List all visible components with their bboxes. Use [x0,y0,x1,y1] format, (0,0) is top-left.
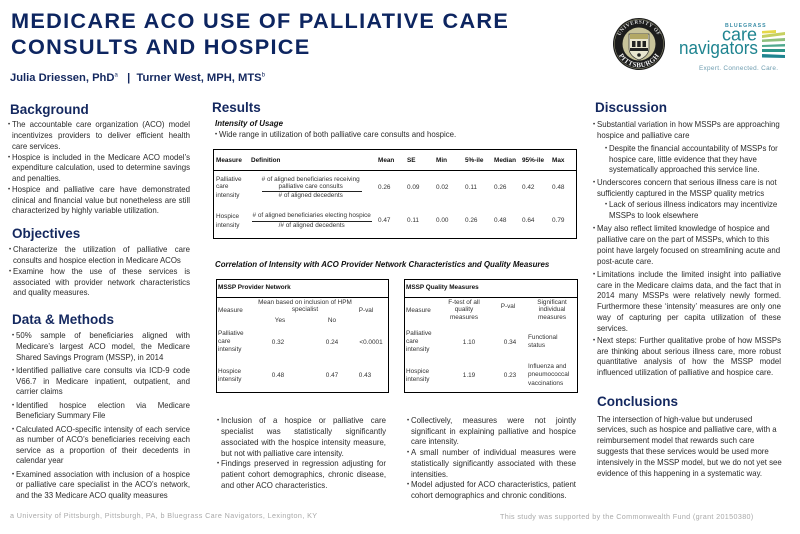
title [11,8,509,59]
table: intensity of usage: Mean [378,157,394,164]
discussion bullet 5: influenced utilization of palliative and hospice care. [597,368,773,377]
data and methods bullets: Identified hospice election via Medicare [16,401,190,410]
background bullets: characterized by highly variable utilization. [12,206,159,215]
heading: background: Background [10,102,89,117]
panel: discussion [593,100,781,377]
subheading: intensity of usage: Intensity of Usage [215,119,283,128]
table: intensity of usage [213,149,577,239]
text: provider network findings: and other ACO characteristics. [221,481,327,490]
panel: data and methods [12,312,190,500]
table: intensity of usage: 0.11 [465,184,477,191]
data and methods bullets: Calculated ACO-specific intensity of each service [16,425,190,434]
table: MSSP quality measures [404,279,578,393]
discussion sub-bullet 1 [605,144,778,174]
data and methods bullets: service as a proportion of their decedents in [16,446,190,455]
background bullets: and penalties. [12,174,61,183]
logo: University of Pittsburgh seal: UNIVERSITY OF [617,20,661,35]
table: intensity of usage: 0.48 [552,184,564,191]
table: intensity of usage: Max [552,157,564,164]
conclusions text: intensively in the MSSP model, but we do not yet see [597,458,782,467]
background bullets: incentivizes providers to deliver efficient health [12,131,190,140]
footer: funding: This study was supported by the Commonwealth Fund (grant 20150380) [500,512,754,521]
table: intensity of usage: 0.02 [436,184,448,191]
table: intensity of usage: # of aligned decedents [279,192,343,199]
conclusions text: The intersection of high-value but underused [597,415,752,424]
discussion bullet 2: Underscores concern that serious illness care is not [597,178,777,187]
discussion bullet 2: sufficiently captured in the MSSP quality metrics [597,189,764,198]
table: MSSP quality measures: Measure [406,307,431,314]
table: intensity of usage: 95%-ile [522,157,544,164]
discussion bullet 5: quantitative analysis of how the MSSP model [597,357,781,366]
table: MSSP provider network: care [218,338,230,345]
discussion sub-bullet 2: MSSPs to look elsewhere [609,211,698,220]
table: intensity of usage: 0.26 [465,217,477,224]
conclusions text [597,415,782,478]
table: intensity of usage: care [216,183,228,190]
data and methods bullets: calendar year [16,456,64,465]
authors: Julia Driessen, PhDa | Turner West, MPH, MTSb [10,72,265,84]
objectives bullets: Characterize the utilization of palliative care [13,245,190,254]
table: intensity of usage: 0.79 [552,217,564,224]
table: MSSP quality measures: P-val [501,303,515,310]
discussion bullet 1: Substantial variation in how MSSPs are approaching [597,120,780,129]
objectives bullets [9,245,190,297]
discussion bullet 3: May also reflect limited knowledge of hospice and [597,224,770,233]
text: quality measure findings: significant in explaining palliative and hospice [411,427,576,436]
data and methods bullets: or palliative care specialist in the ACO’s network, [16,480,190,489]
data and methods bullets: 50% sample of beneficiaries aligned with [16,331,190,340]
subheading: correlation: Correlation of Intensity with ACO Provider Network Characteristics and Quality Measures [215,260,549,269]
table: intensity of usage: /# of aligned decedents [279,222,345,229]
discussion bullet 5: are thinking about serious illness care, more robust [597,347,781,356]
logo: Bluegrass Care Navigators: Expert. Connected. Care. [699,65,778,72]
table: MSSP provider network: MSSP Provider Network [218,284,291,291]
table: intensity of usage: Hospice [216,213,239,220]
table: MSSP quality measures: MSSP Quality Measures [406,284,479,291]
table: intensity of usage: 0.11 [407,217,419,224]
discussion sub-bullet 2: Lack of serious illness indicators may incentivize [609,200,777,209]
heading: objectives: Objectives [12,226,80,241]
text: quality measure findings: Collectively, measures were not jointly [411,416,576,425]
table: intensity of usage: 0.26 [378,184,390,191]
text: provider network findings: patient cohort demographics, chronic disease, [221,470,386,479]
text: quality measure findings [407,416,576,500]
objectives bullets: and quality measures. [13,288,90,297]
table: intensity of usage: Measure [216,157,242,164]
heading: results: Results [212,100,261,115]
table: intensity of usage: palliative care consults [279,183,343,190]
discussion bullet 4: Limitations include the limited insight into palliative [597,270,781,279]
objectives bullets: consults and hospice election in Medicare ACOs [13,256,181,265]
table: MSSP quality measures: measures [450,314,478,321]
discussion sub-bullet 1: Despite the financial accountability of MSSPs for [609,144,778,153]
discussion bullet 3: post-acute care. [597,257,653,266]
table: intensity of usage: 0.47 [378,217,390,224]
text: provider network findings: specialist was statistically significantly [221,427,386,436]
background bullets: The accountable care organization (ACO) model [12,120,190,129]
discussion sub-bullet 1: systematically approached this service line. [609,165,759,174]
table: MSSP quality measures: individual [539,306,565,313]
table: MSSP provider network: 0.43 [359,372,371,379]
data and methods bullets: Medicare’s largest ACO model, the Medicare [16,342,190,351]
text: quality measure findings: intensities. [411,470,448,479]
discussion bullet 2 [593,178,777,198]
table: intensity of usage: 0.09 [407,184,419,191]
table: intensity of usage: Min [436,157,447,164]
conclusions text: suggests that these services would be used more [597,447,769,456]
background bullets: Hospice is included in the Medicare ACO model’s [12,153,190,162]
heading: discussion: Discussion [595,100,667,115]
table: MSSP provider network: 0.48 [272,372,284,379]
table: MSSP provider network: No [328,317,336,324]
table: intensity of usage: SE [407,157,416,164]
logo: University of Pittsburgh seal: PITTSBURGH [618,53,660,68]
discussion bullet 4: Furthermore these ‘intensity’ measures are only one [597,302,781,311]
table: MSSP provider network: 0.32 [272,339,284,346]
table: MSSP quality measures: status [528,342,545,349]
text: provider network findings: associated with the hospice intensity measure, [221,438,386,447]
table: MSSP quality measures: measures [538,314,566,321]
table: intensity of usage: intensity [216,192,239,199]
footer: affiliations: a University of Pittsburgh, Pittsburgh, PA, b Bluegrass Care Navigators, Lexington, KY [10,511,317,520]
discussion bullet 1 [593,120,780,140]
table: intensity of usage: Median [494,157,516,164]
table: MSSP quality measures: F-test of all [448,299,480,306]
table: MSSP quality measures: Hospice [406,368,429,375]
table: MSSP quality measures: 1.10 [463,339,475,346]
logo: University of Pittsburgh seal [613,18,665,70]
title: CONSULTS AND HOSPICE [11,34,311,59]
table: MSSP quality measures: intensity [406,376,429,383]
title: MEDICARE ACO USE OF PALLIATIVE CARE [11,8,509,33]
table: MSSP quality measures: intensity [406,346,429,353]
data and methods bullets [12,331,190,500]
background bullets: care services. [12,142,60,151]
table: intensity of usage: Palliative [216,176,242,183]
table: intensity of usage: Definition [251,157,280,164]
text: quality measure findings: A small number of individual measures were [411,448,576,457]
table: MSSP provider network: Hospice [218,368,241,375]
panel: conclusions [597,394,782,478]
data and methods bullets: and the 33 Medicare ACO quality measures [16,491,168,500]
conclusions text: reimbursement model that rewards such care [597,436,754,445]
discussion sub-bullet 2 [605,200,777,220]
table: MSSP quality measures: 1.19 [463,372,475,379]
table: MSSP quality measures: care [406,338,418,345]
logo: Bluegrass Care Navigators: BLUEGRASS [725,23,767,29]
table: intensity of usage: # of aligned beneficiaries electing hospice [253,212,371,219]
table: MSSP provider network: 0.24 [326,339,338,346]
discussion bullet 4: way of capturing per capita utilization of these [597,313,781,322]
table: MSSP provider network: Palliative [218,330,244,337]
discussion bullet 4 [593,270,781,333]
data and methods bullets: Shared Savings Program (MSSP), in 2014 [16,353,163,362]
background bullets: Hospice and palliative care have demonstrated [12,185,190,194]
discussion bullet 4: services. [597,324,628,333]
panel: objectives [9,226,190,297]
text: quality measure findings: Model adjusted for ACO characteristics, patient [411,480,576,489]
table: MSSP quality measures: Palliative [406,330,432,337]
heading: conclusions: Conclusions [597,394,678,409]
table: intensity of usage: 0.48 [494,217,506,224]
logo: Bluegrass Care Navigators: navigators [679,38,758,58]
background bullets: clinical and financial value but nonetheless are still [12,196,190,205]
table: MSSP provider network: specialist [292,306,318,313]
table: MSSP provider network [216,279,389,393]
discussion bullet 4: 2014 many MSSPs were relatively newly formed. [597,291,781,300]
table: MSSP quality measures: vaccinations [528,380,563,387]
table: MSSP provider network: P-val [359,307,373,314]
results intro bullet: Wide range in utilization of both palliative care consults and hospice. [219,130,456,139]
discussion bullet 3: palliative care on the part of MSSPs, which to this [597,235,769,244]
logo: Bluegrass Care Navigators: care [722,24,757,44]
text: quality measure findings: care intensity. [411,437,459,446]
discussion bullet 5 [593,336,781,377]
table: intensity of usage: # of aligned beneficiaries receiving [262,176,360,183]
table: MSSP quality measures: Functional [528,334,558,341]
table: intensity of usage: 5%-ile [465,157,483,164]
text: provider network findings: Inclusion of a hospice or palliative care [221,416,386,425]
text: provider network findings: Findings preserved in regression adjusting for [221,459,386,468]
table: MSSP quality measures: Significant [537,299,567,306]
data and methods bullets: Identified palliative care consults via ICD-9 code [16,366,190,375]
discussion bullet 4: care in the Medicare claims data, and the fact that in [597,281,781,290]
table: MSSP provider network: 0.47 [326,372,338,379]
discussion bullet 5: Next steps: Further qualitative probe of how MSSPs [597,336,781,345]
table: MSSP quality measures: 0.34 [504,339,516,346]
objectives bullets: Examine how the use of these services is [13,267,190,276]
discussion bullet 3: point have largely focused on streamlining acute and [597,246,780,255]
background bullets [8,120,190,215]
table: MSSP provider network: Measure [218,307,243,314]
table: MSSP provider network: <0.0001 [359,339,383,346]
table: MSSP quality measures: pneumococcal [528,371,569,378]
conclusions text: services, such as hospice and palliative care, with a [597,425,777,434]
discussion bullet 1: hospice and palliative care [597,131,689,140]
table: MSSP provider network: intensity [218,346,241,353]
background bullets: expenditure calculation, used to determine savings [12,163,190,172]
text: quality measure findings: cohort demographics and chronic conditions. [411,491,567,500]
discussion sub-bullet 1: hospice care, little evidence that they have [609,155,757,164]
table: MSSP quality measures: Influenza and [528,363,566,370]
heading: data and methods: Data & Methods [12,312,114,327]
data and methods bullets: as number of ACO’s beneficiaries receiving each [16,435,190,444]
text: provider network findings [217,416,386,490]
table: MSSP provider network: Yes [275,317,285,324]
table: MSSP quality measures: 0.23 [504,372,516,379]
panel: background [8,102,190,215]
table: intensity of usage: 0.26 [494,184,506,191]
logo: Bluegrass Care Navigators [679,23,785,72]
text: provider network findings: but not with palliative care intensity. [221,449,344,458]
table: intensity of usage: 0.64 [522,217,534,224]
table: MSSP provider network: intensity [218,376,241,383]
text: quality measure findings: statistically significantly associated with these [411,459,576,468]
data and methods bullets: carrier claims [16,387,63,396]
data and methods bullets: Beneficiary Summary File [16,411,105,420]
table: MSSP provider network: Mean based on inclusion of HPM [258,299,352,306]
data and methods bullets: Examined association with inclusion of a hospice [16,470,190,479]
table: intensity of usage: 0.00 [436,217,448,224]
table: MSSP quality measures: quality [455,306,473,313]
table: intensity of usage: 0.42 [522,184,534,191]
conclusions text: evidence of this happening in a systematic way. [597,469,762,478]
data and methods bullets: V66.7 in Medicare inpatient, outpatient, and [16,377,190,386]
objectives bullets: associated with provider network characteristics [13,278,190,287]
discussion bullet 3 [593,224,780,266]
table: intensity of usage: intensity [216,222,239,229]
